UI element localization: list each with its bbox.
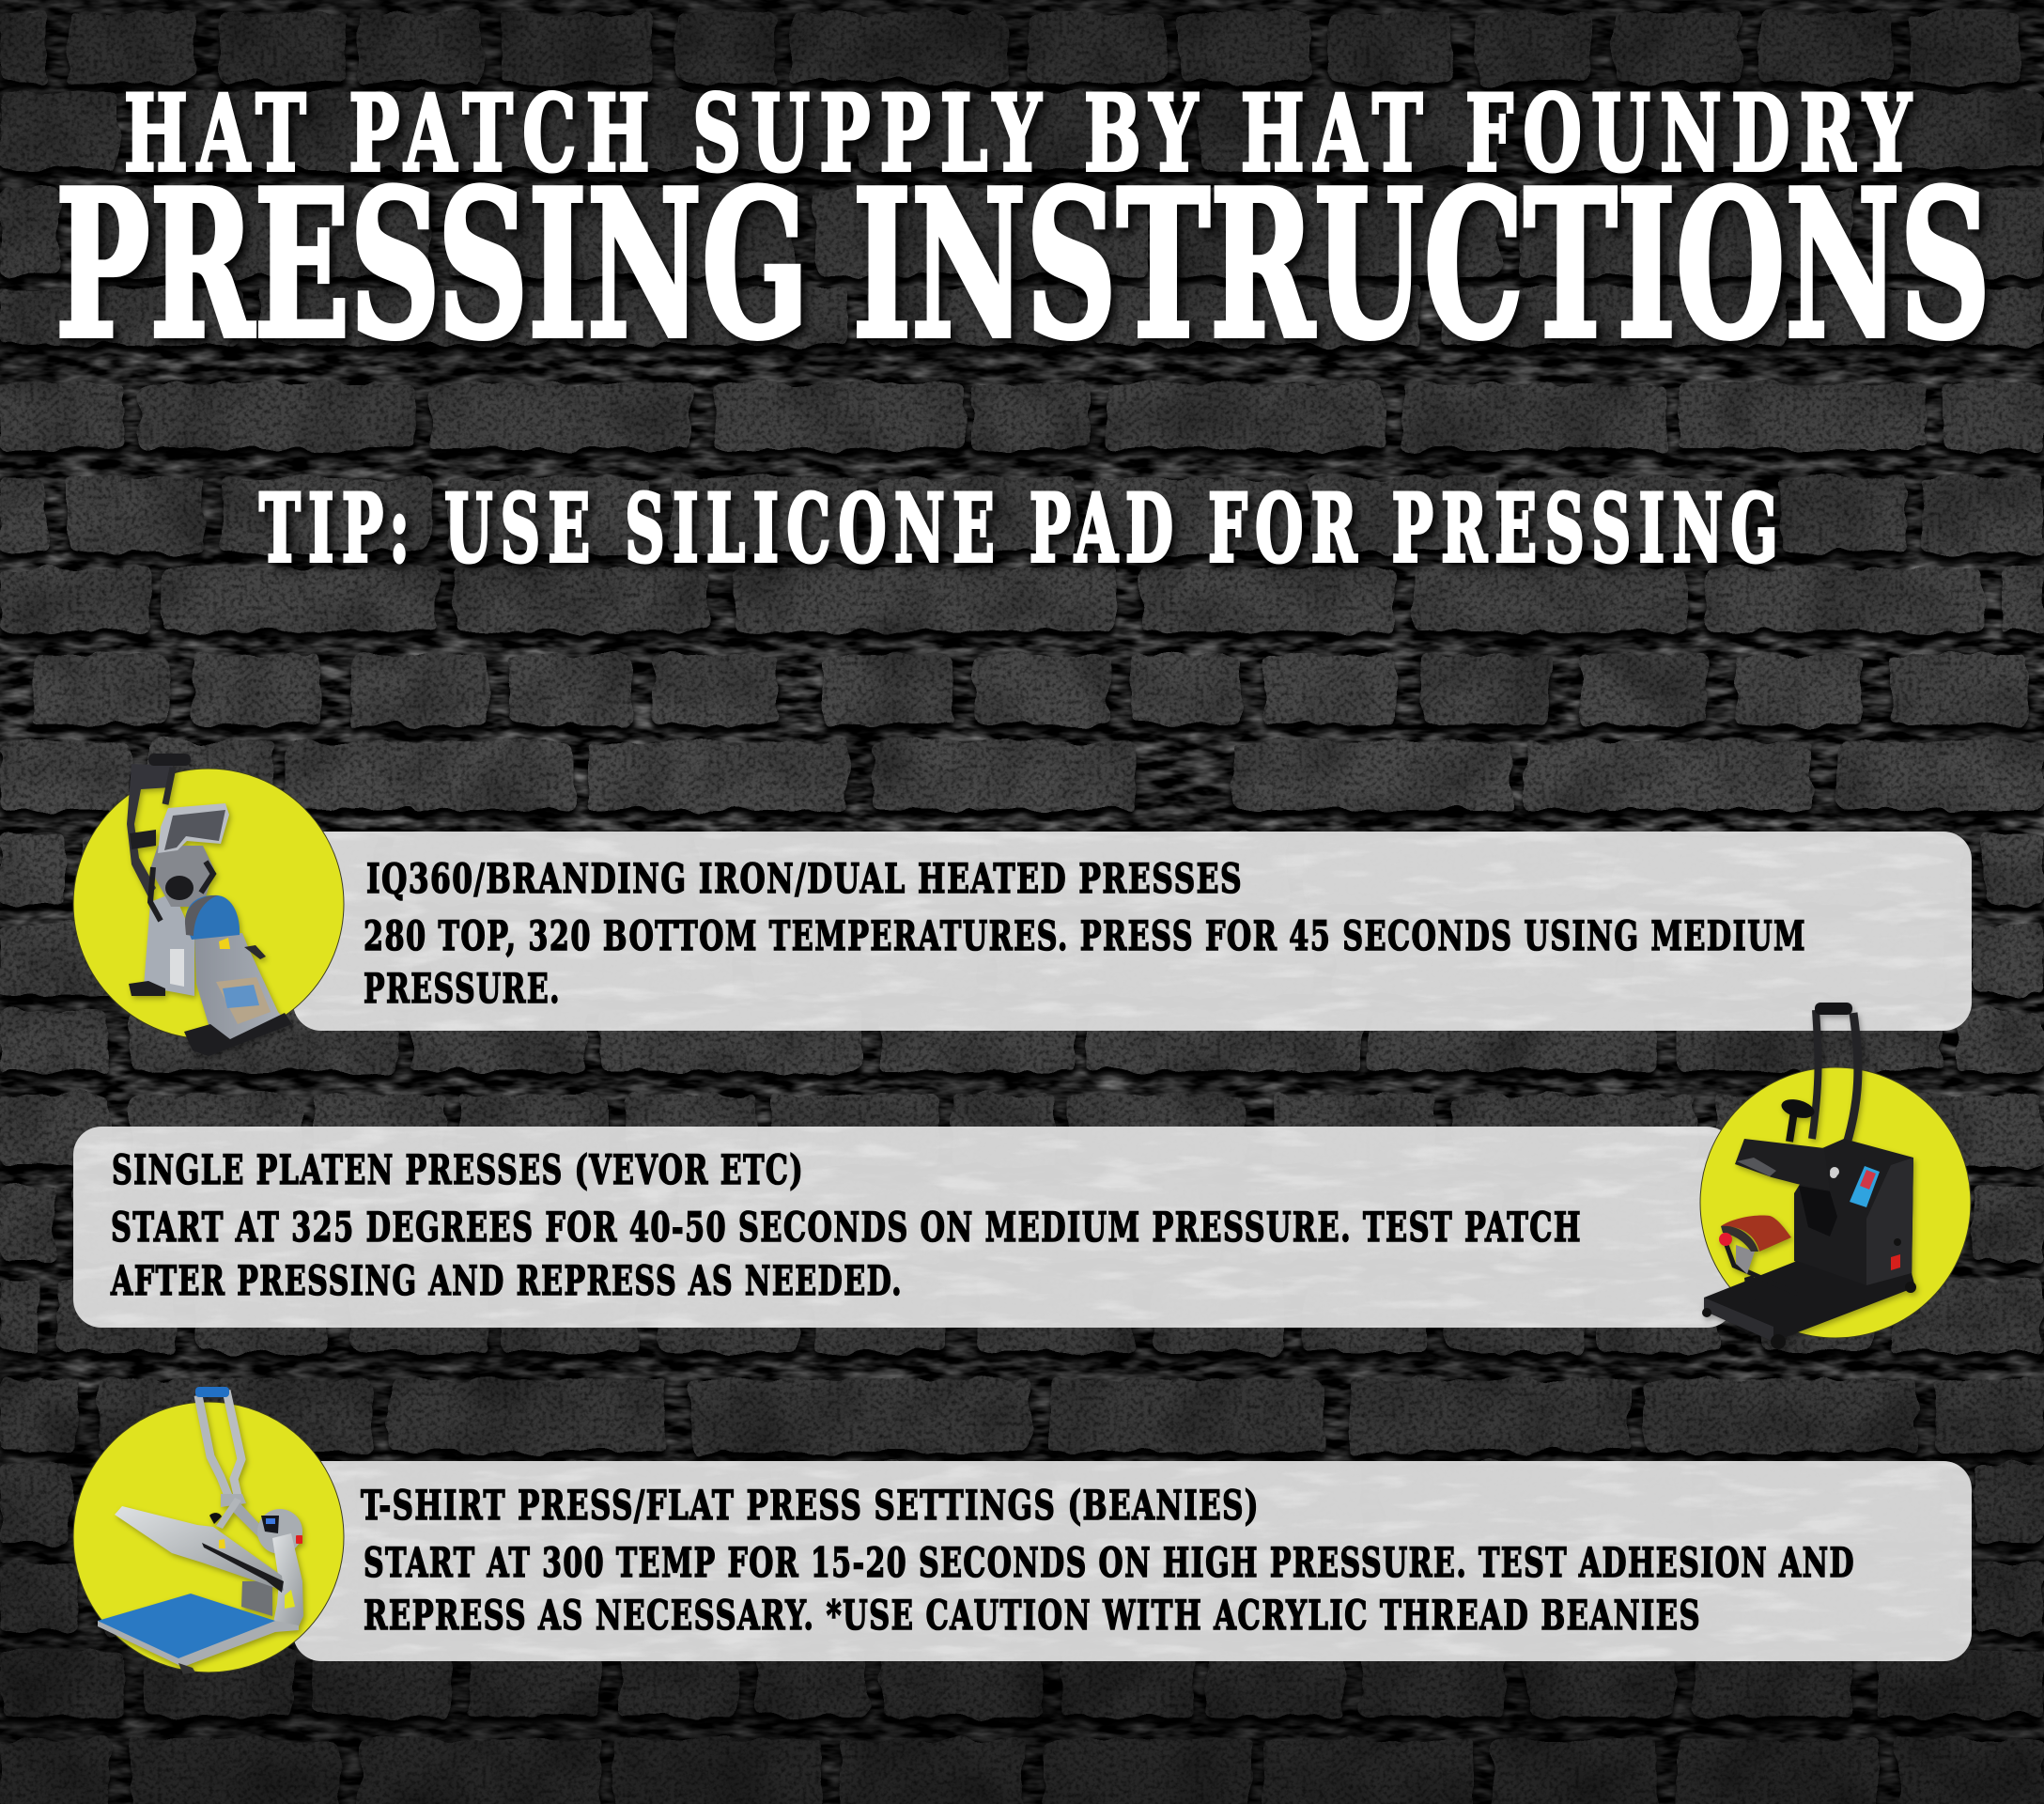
panel: t-shirt and flat press settings <box>293 1461 1972 1661</box>
panel: IQ360 dual heated presses <box>293 832 1972 1031</box>
panel 2 heading: SINGLE PLATEN PRESSES (VEVOR ETC) <box>112 1147 804 1194</box>
panel 3 body text <box>364 1540 1855 1640</box>
icon: single platen cap press on yellow circle <box>1700 1003 1971 1349</box>
icon: flat t-shirt press on yellow circle <box>73 1387 344 1674</box>
icon: IQ360 cap press on yellow circle <box>73 754 344 1056</box>
panel 2 body text: AFTER PRESSING AND REPRESS AS NEEDED. <box>110 1258 903 1305</box>
panel 1 body text: PRESSURE. <box>364 966 561 1013</box>
panel 2 body text <box>110 1205 1582 1305</box>
panel 1 body text <box>364 913 1806 1013</box>
panel 1 heading: IQ360/BRANDING IRON/DUAL HEATED PRESSES <box>366 856 1243 903</box>
panel 3 heading: T-SHIRT PRESS/FLAT PRESS SETTINGS (BEANIES) <box>361 1483 1260 1530</box>
panel: single platen presses <box>73 1127 1735 1328</box>
